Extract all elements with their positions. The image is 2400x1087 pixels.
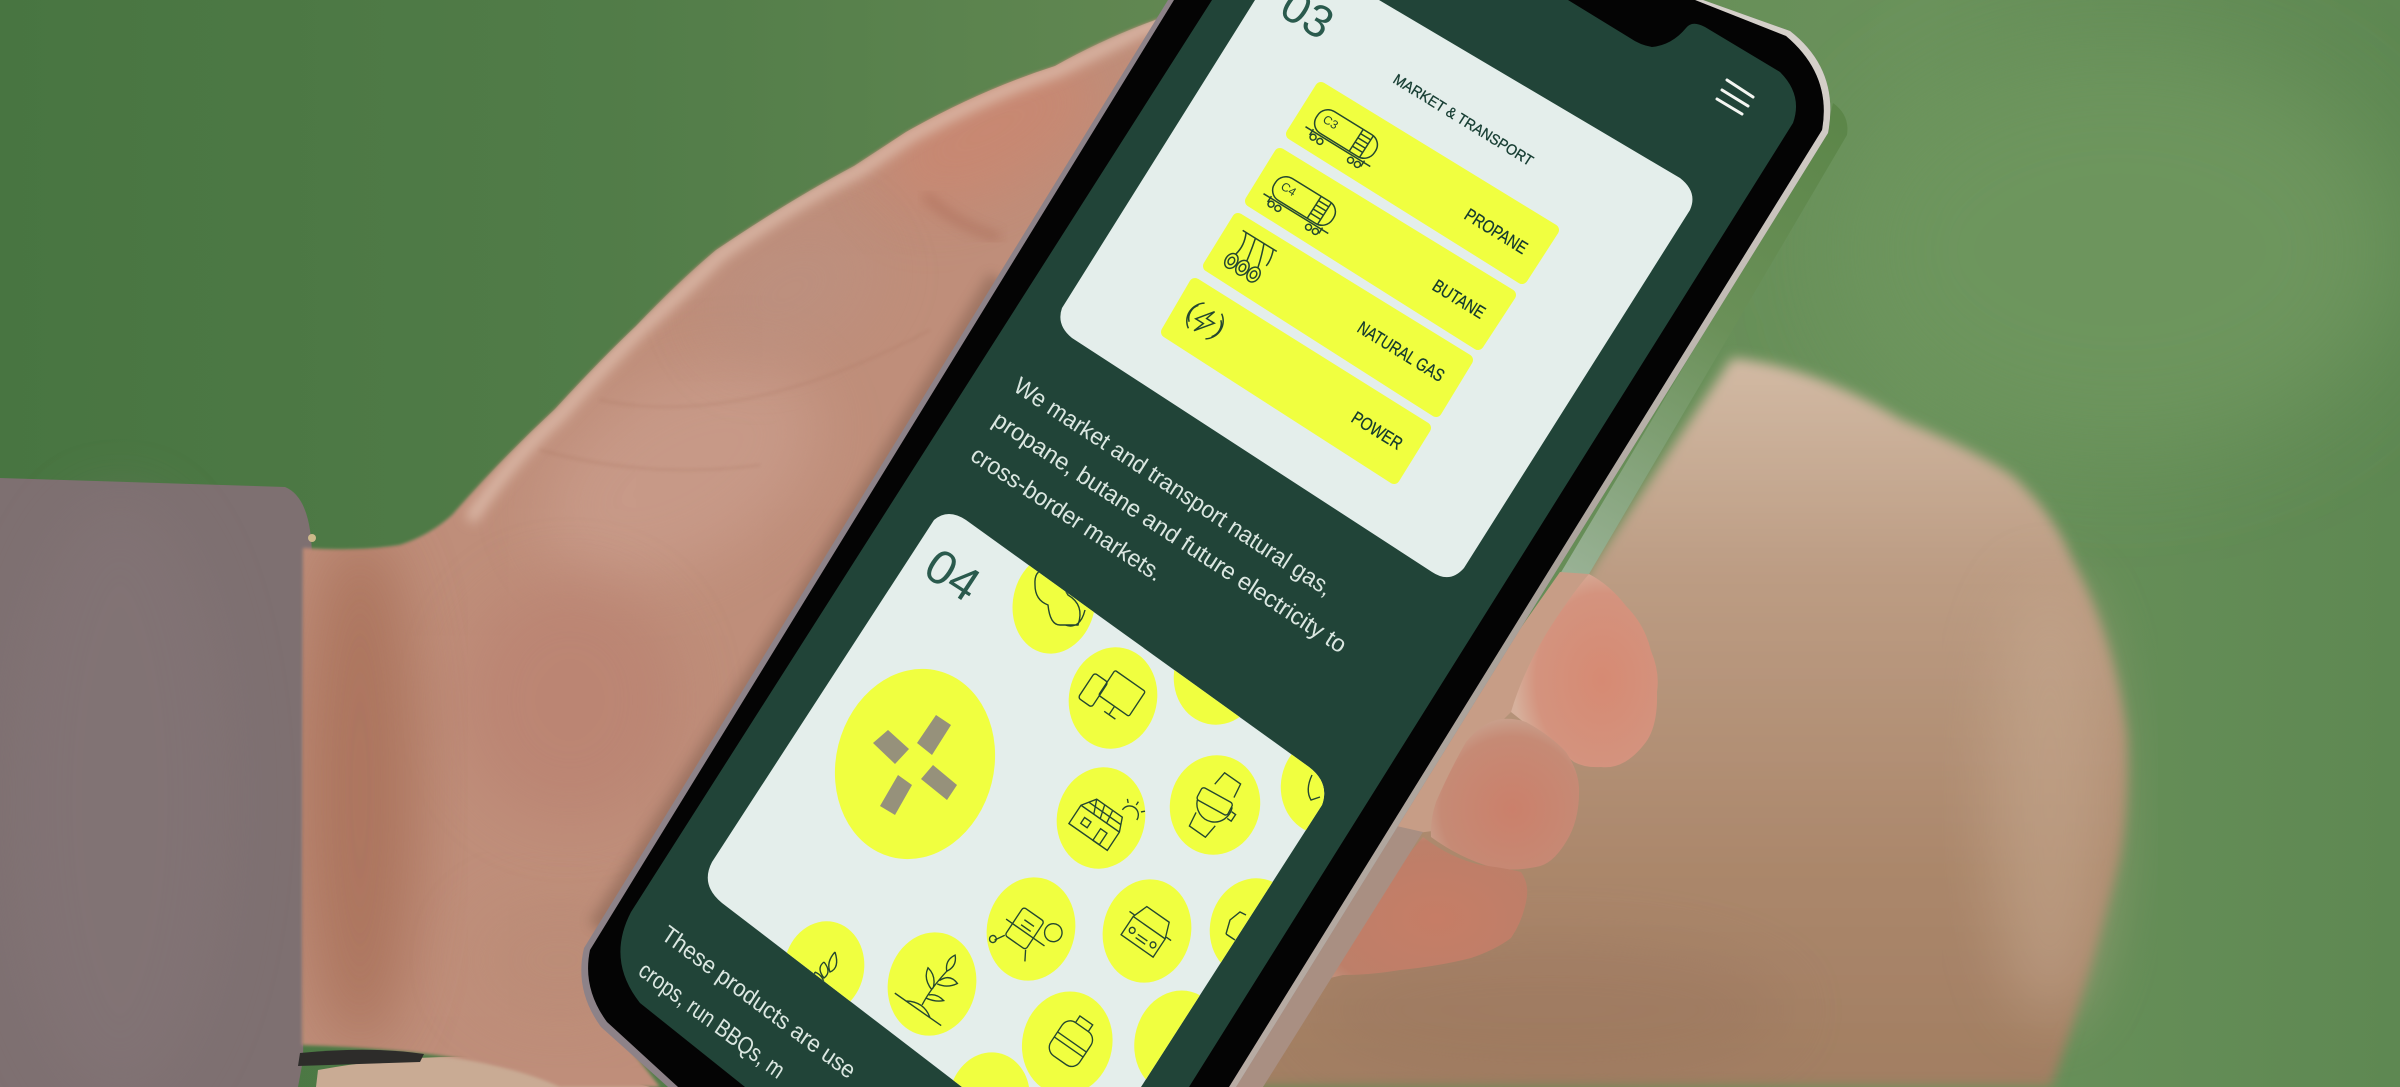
- grey sleeve: [0, 478, 312, 1087]
- panel: card 04 products: [708, 514, 1380, 1087]
- circle: devices: [1068, 647, 1158, 749]
- circle: plant sprout: [888, 932, 976, 1036]
- hand palm and thumb: [298, 14, 1172, 1087]
- circle: right partial: [1210, 878, 1272, 963]
- text block: market and transport description: We market and transport natural gas,: [1009, 372, 1337, 602]
- icon circles grid: [786, 566, 1324, 1087]
- circle: bbq: [986, 877, 1076, 981]
- bar: butane: [1251, 154, 1510, 344]
- icon: tank car C4: C4: [1278, 179, 1299, 199]
- circle: bottom partial: [951, 1052, 1029, 1087]
- icon: tank car C3: [1301, 103, 1385, 173]
- phone side metal below fingers: [1228, 825, 1423, 1087]
- rim highlight right: [1229, 0, 1830, 1087]
- finger 1: [1511, 574, 1658, 767]
- icon: lightning power: [1182, 299, 1228, 343]
- tan knee: [316, 358, 2128, 1087]
- fingers over the phone back: [1300, 572, 1658, 985]
- label natural gas: NATURAL GAS: [1354, 318, 1448, 386]
- logo: four-part cross: [873, 715, 957, 815]
- bracelet glint: [308, 534, 316, 542]
- circle: partially hidden: [1174, 670, 1240, 725]
- circle: right edge: [1280, 754, 1324, 830]
- circle: bottom right partial: [1134, 990, 1200, 1080]
- label propane: PROPANE: [1461, 205, 1531, 258]
- card 03 background: [1060, 0, 1692, 577]
- circle: car: [1102, 879, 1192, 983]
- heading market and transport: MARKET & TRANSPORT: [1390, 71, 1536, 170]
- metal rim: [581, 0, 1830, 1087]
- icon: pipelines: [1221, 230, 1277, 285]
- finger 3: [1300, 837, 1527, 985]
- label power: POWER: [1348, 408, 1406, 454]
- finger 2: [1431, 719, 1579, 870]
- circle: wheat: [786, 921, 864, 1002]
- black bezel: [588, 0, 1824, 1087]
- screen: [620, 0, 1796, 1087]
- panel: card 03 market and transport: [1060, 0, 1692, 577]
- hamburger menu icon: [1717, 80, 1753, 114]
- circle: solar house: [1056, 767, 1146, 869]
- finger bases beside the phone: [1395, 572, 1589, 836]
- icon: tank car C4: [1259, 170, 1343, 240]
- label butane: BUTANE: [1429, 276, 1489, 323]
- bar: power: [1167, 284, 1425, 478]
- icon: tank car C3: C3: [1320, 112, 1341, 132]
- big yellow circle with logo: [815, 652, 1015, 876]
- circle: shoes: [1012, 566, 1094, 654]
- text block: market and transport description: propane, butane and future electricity to: [988, 406, 1351, 659]
- card 04 background: [708, 514, 1324, 1087]
- phone back side band: [1560, 103, 1847, 574]
- bar: propane: [1292, 88, 1553, 278]
- card number 04: 04: [915, 538, 990, 612]
- text block: market and transport description: cross-border markets.: [966, 441, 1167, 587]
- circle: gas cylinder: [1022, 991, 1113, 1087]
- dark strap at wrist: [298, 1050, 424, 1066]
- phone body: [581, 0, 1830, 1087]
- bar: natural gas: [1209, 219, 1467, 411]
- circle: smart watch: [1170, 755, 1260, 855]
